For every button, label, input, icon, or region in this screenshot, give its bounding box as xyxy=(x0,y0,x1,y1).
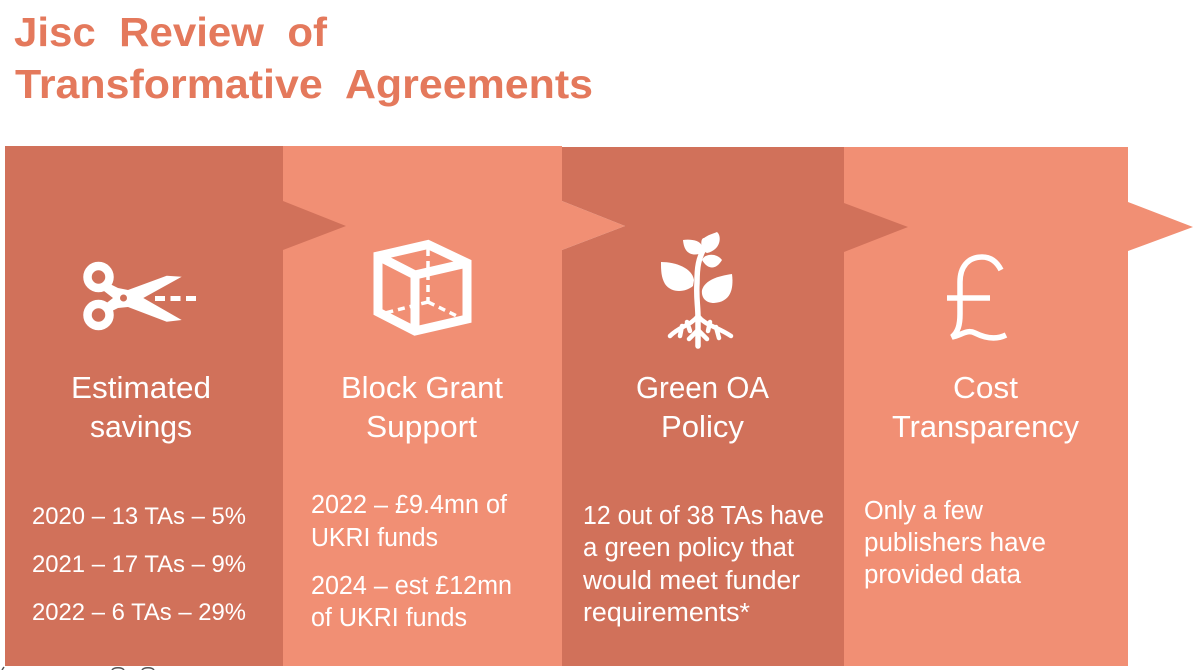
heading: block grant support: Block Grant xyxy=(341,370,503,405)
panel: estimated savings xyxy=(5,146,346,666)
panel: block grant support xyxy=(283,146,625,666)
heading: cost transparency: Cost xyxy=(953,370,1018,405)
heading: estimated savings: Estimated xyxy=(71,370,211,405)
text: green OA detail: would meet funder xyxy=(582,567,801,595)
text: green OA detail xyxy=(582,502,824,627)
text: cost transparency detail xyxy=(864,497,1046,589)
heading: block grant support: Support xyxy=(366,409,477,444)
panel: cost transparency xyxy=(844,147,1193,666)
heading: block grant support xyxy=(341,370,503,444)
heading: cost transparency xyxy=(892,370,1079,444)
text: block grant figures xyxy=(311,491,512,632)
heading: green OA policy: Policy xyxy=(661,409,744,444)
text: green OA detail: 12 out of 38 TAs have xyxy=(583,502,824,530)
text: estimated savings figures: 2020 – 13 TAs – 5% xyxy=(32,503,246,530)
title xyxy=(14,9,593,107)
title: Jisc Review of xyxy=(14,9,327,55)
text: estimated savings figures: 2022 – 6 TAs – 29% xyxy=(32,599,246,626)
heading: green OA policy xyxy=(636,370,769,444)
heading: green OA policy: Green OA xyxy=(636,370,769,405)
icon: scissors xyxy=(88,266,196,326)
heading: estimated savings: savings xyxy=(90,409,192,444)
text: cost transparency detail: Only a few xyxy=(864,497,984,525)
text: estimated savings figures xyxy=(32,503,246,626)
text: block grant figures: UKRI funds xyxy=(311,524,438,552)
text: green OA detail: a green policy that xyxy=(583,534,794,562)
text: estimated savings figures: 2021 – 17 TAs – 9% xyxy=(32,551,246,578)
panel: green OA policy xyxy=(562,147,908,666)
icon: pound sign xyxy=(947,257,1006,338)
title: Transformative Agreements xyxy=(15,61,593,107)
heading: cost transparency: Transparency xyxy=(892,409,1079,444)
text: block grant figures: of UKRI funds xyxy=(311,604,467,632)
text: green OA detail: requirements* xyxy=(583,599,750,627)
icon: plant xyxy=(661,232,732,346)
text: cost transparency detail: provided data xyxy=(864,561,1022,589)
icon: cube xyxy=(378,244,467,331)
text: block grant figures: 2022 – £9.4mn of xyxy=(311,491,508,519)
text: block grant figures: 2024 – est £12mn xyxy=(311,572,512,600)
text: cost transparency detail: publishers have xyxy=(864,529,1046,557)
heading: estimated savings xyxy=(71,370,211,444)
